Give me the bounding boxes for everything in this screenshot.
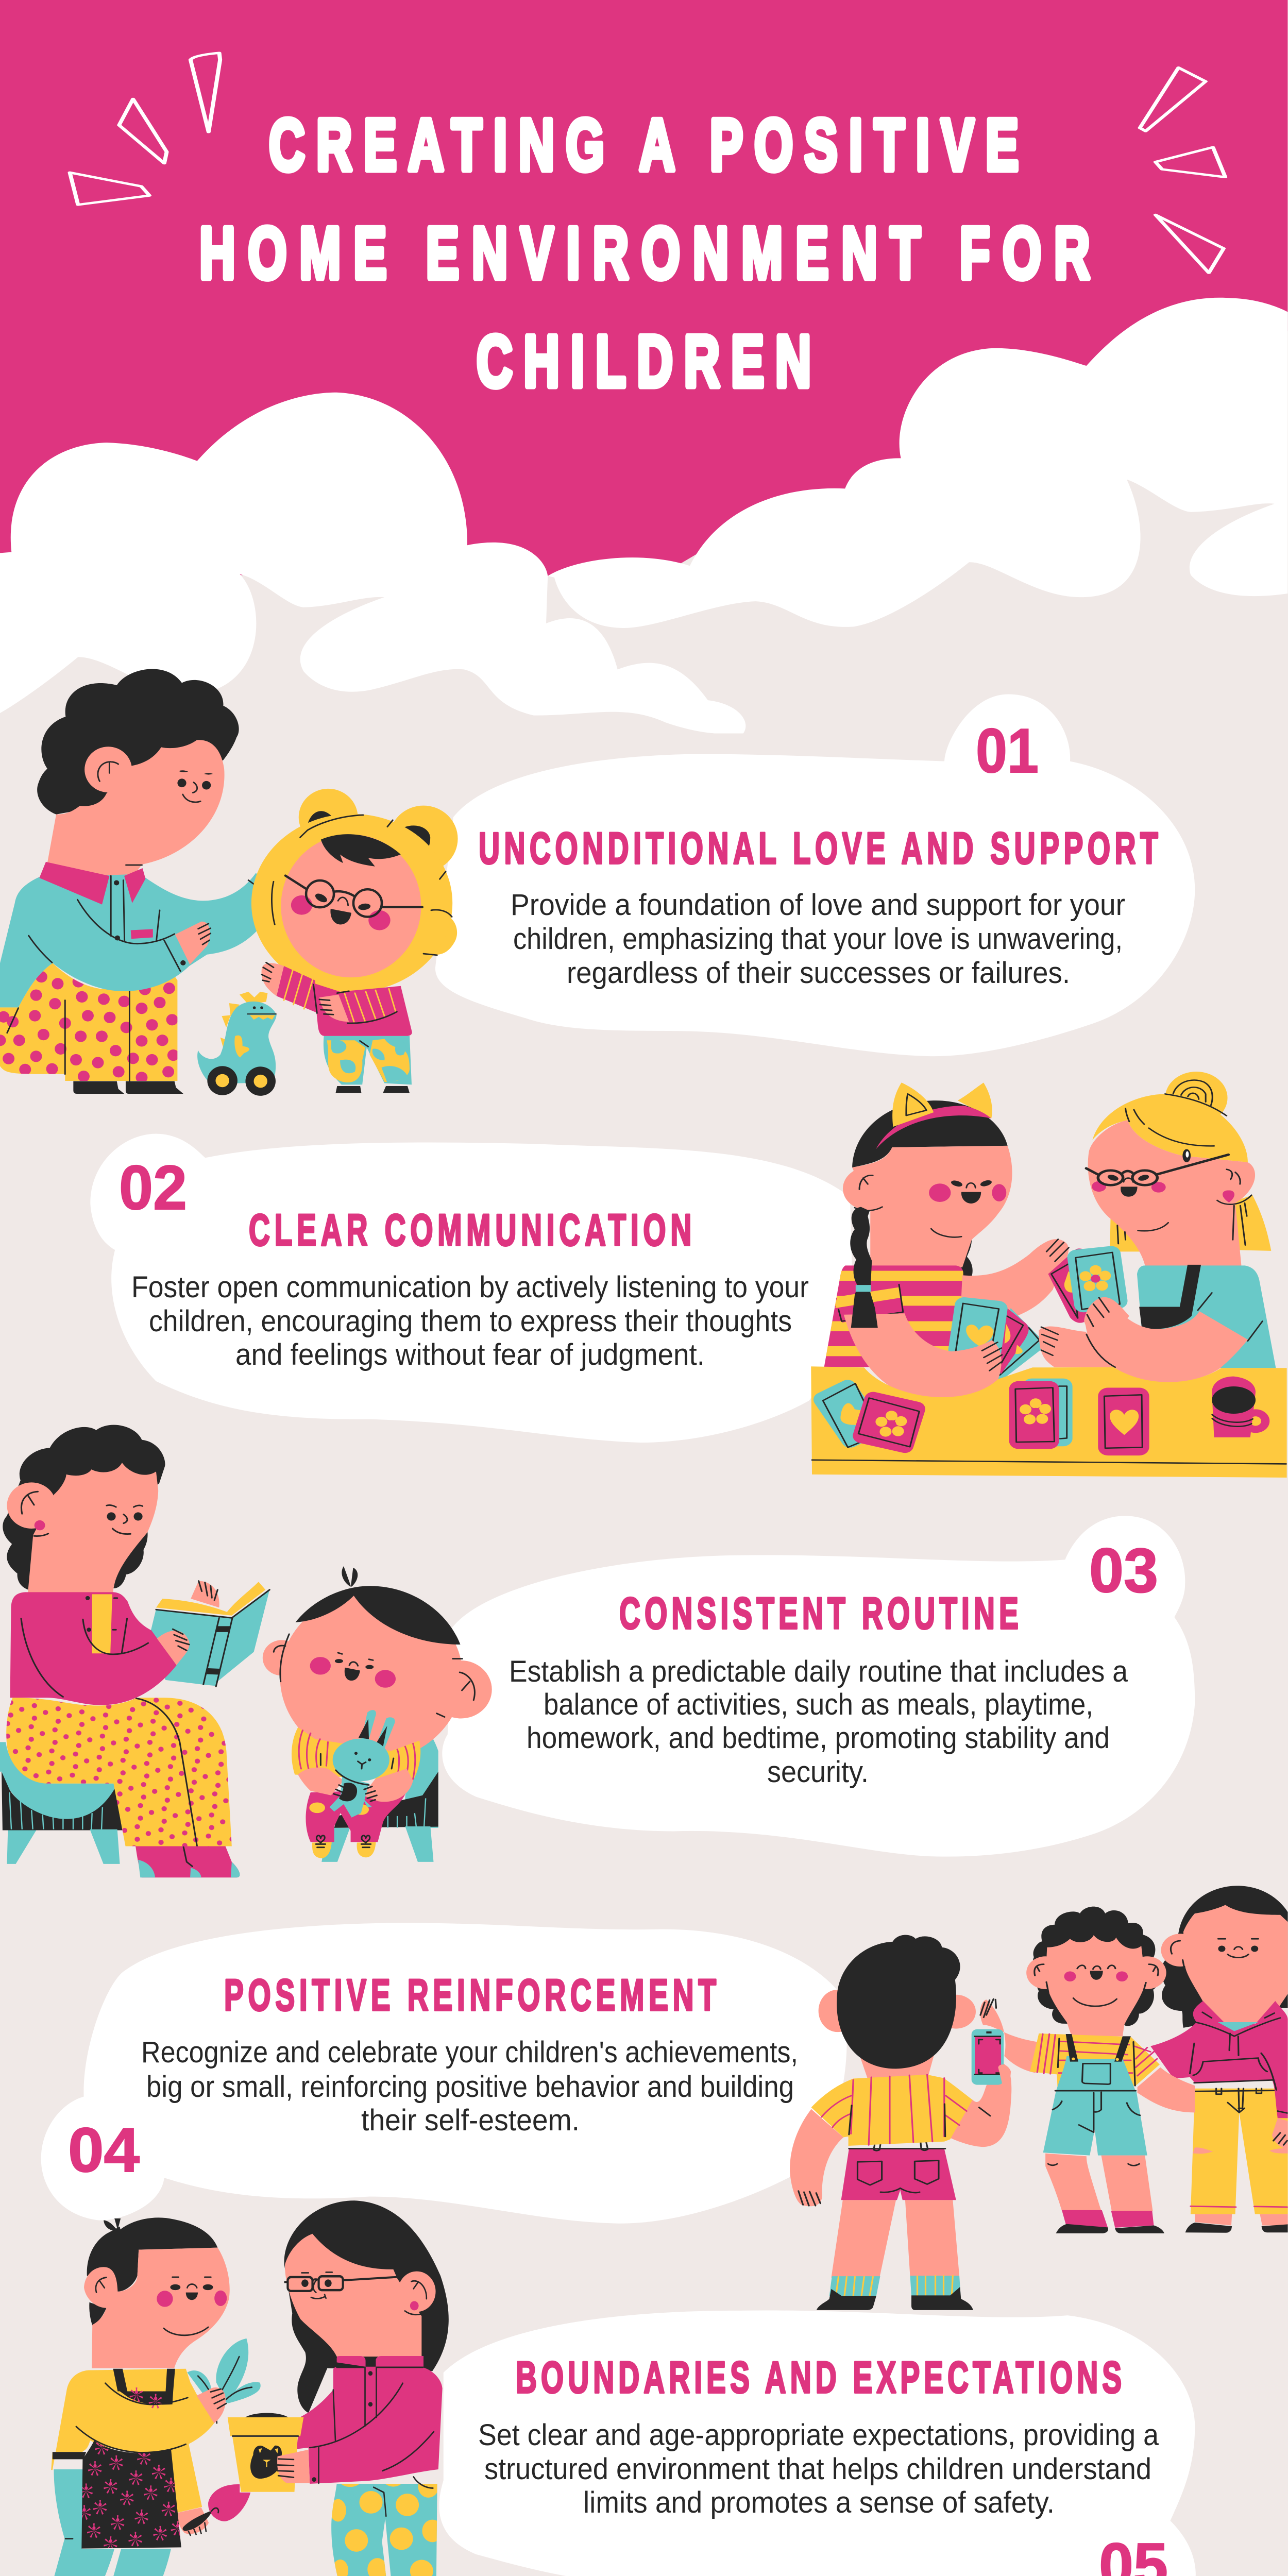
step 03 heading: CONSISTENT ROUTINE [619, 1589, 1019, 1638]
step 02 body [131, 1270, 809, 1371]
step 04 body: big or small, reinforcing positive behavior and building [146, 2070, 794, 2104]
pink header band [0, 0, 1287, 578]
step 01 body [511, 888, 1125, 990]
panel: step 01 bubble [435, 694, 1195, 1056]
step 03 body: Establish a predictable daily routine that includes a [509, 1655, 1128, 1688]
middle child [1033, 1907, 1160, 2026]
step 01 body: regardless of their successes or failures. [567, 956, 1070, 990]
step 01 body: children, emphasizing that your love is unwavering, [513, 922, 1123, 956]
step 01 body: Provide a foundation of love and support for your [511, 888, 1125, 922]
step 02 number: 02 [119, 1153, 187, 1223]
panel: step 03 bubble [442, 1516, 1195, 1857]
back boy [790, 2063, 1011, 2206]
step 04 heading: POSITIVE REINFORCEMENT [224, 1971, 716, 2020]
step 03 body: security. [767, 1755, 869, 1789]
step 05 body: structured environment that helps children understand [484, 2452, 1151, 2486]
title: CREATING A POSITIVE [269, 104, 1019, 185]
icon: title accent sparks [70, 53, 1225, 273]
step 03 body [509, 1655, 1128, 1789]
step 03 number: 03 [1089, 1535, 1158, 1605]
step 05 body [478, 2418, 1159, 2519]
step 05 body: limits and promotes a sense of safety. [583, 2486, 1055, 2519]
step 03 body: homework, and bedtime, promoting stability and [527, 1721, 1110, 1755]
illustration: parent and child in bear hood [0, 669, 458, 1096]
title: HOME ENVIRONMENT FOR [199, 212, 1090, 294]
step 03 body: balance of activities, such as meals, playtime, [544, 1688, 1093, 1721]
step 02 heading: CLEAR COMMUNICATION [249, 1206, 691, 1255]
step 02 body: Foster open communication by actively listening to your [131, 1270, 809, 1304]
step 01 number: 01 [976, 716, 1039, 786]
title: CHILDREN [477, 320, 811, 402]
step 04 number: 04 [68, 2115, 140, 2185]
step 05 heading: BOUNDARIES AND EXPECTATIONS [516, 2353, 1122, 2402]
woman [284, 2200, 449, 2413]
illustration: two people with a potted plant [42, 2200, 449, 2576]
title [199, 104, 1090, 402]
step 01 heading: UNCONDITIONAL LOVE AND SUPPORT [479, 824, 1158, 873]
panel: step 05 bubble [439, 2311, 1196, 2576]
illustration: girl and grandmother playing cards [810, 1072, 1287, 1478]
step 02 body: children, encouraging them to express their thoughts [149, 1304, 792, 1338]
panel: step 02 bubble [90, 1134, 854, 1443]
white clouds under the header [0, 298, 1287, 733]
illustration: three kids with phone [790, 1886, 1288, 2310]
man [87, 2217, 217, 2292]
step 02 body: and feelings without fear of judgment. [235, 1338, 705, 1371]
step 04 body: their self-esteem. [361, 2104, 580, 2137]
step 04 body [141, 2036, 798, 2137]
right woman [1162, 1886, 1288, 2028]
illustration: mother reading to child on chairs [0, 1425, 492, 1877]
step 05 body: Set clear and age-appropriate expectations, providing a [478, 2418, 1159, 2452]
step 04 body: Recognize and celebrate your children's achievements, [141, 2036, 798, 2069]
panel: step 04 bubble [41, 1923, 847, 2224]
